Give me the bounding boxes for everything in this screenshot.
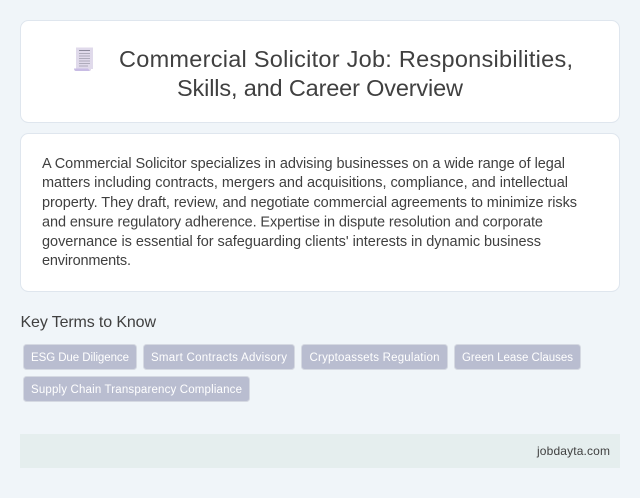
chip: Supply Chain Transparency Compliance: Supply Chain Transparency Compliance	[31, 384, 242, 396]
chips: key terms	[24, 344, 580, 402]
panel: description	[20, 134, 620, 292]
description text: and ensure regulatory adherence. Expertise in dispute resolution and corporate	[42, 214, 543, 230]
chip: Cryptoassets Regulation: Cryptoassets Regulation	[310, 352, 440, 364]
chip: ESG Due Diligence	[24, 344, 136, 370]
icon: document scroll	[74, 48, 93, 71]
description text	[42, 156, 577, 269]
chip: Supply Chain Transparency Compliance	[24, 376, 250, 402]
description text: A Commercial Solicitor specializes in advising businesses on a wide range of legal	[42, 156, 565, 172]
panel: header	[20, 20, 620, 122]
heading: key terms: Key Terms to Know	[20, 314, 156, 331]
title: Skills, and Career Overview	[177, 75, 464, 101]
footer	[20, 434, 620, 468]
chip: Cryptoassets Regulation	[302, 344, 448, 370]
chip: Green Lease Clauses	[454, 344, 580, 370]
chip: Smart Contracts Advisory	[144, 344, 294, 370]
chip: Smart Contracts Advisory: Smart Contracts Advisory	[151, 352, 287, 364]
footer: jobdayta.com	[536, 444, 610, 458]
description text: governance is essential for safeguarding clients' interests in dynamic business	[42, 234, 541, 250]
description text: environments.	[42, 253, 131, 269]
description text: matters including contracts, mergers and acquisitions, compliance, and intellectual	[42, 175, 568, 191]
title	[119, 46, 573, 101]
description text: property. They draft, review, and negotiate commercial agreements to minimize risks	[42, 195, 577, 211]
title: Commercial Solicitor Job: Responsibilities,	[119, 46, 573, 72]
chip: ESG Due Diligence: ESG Due Diligence	[31, 352, 129, 364]
chip: Green Lease Clauses: Green Lease Clauses	[462, 352, 573, 364]
